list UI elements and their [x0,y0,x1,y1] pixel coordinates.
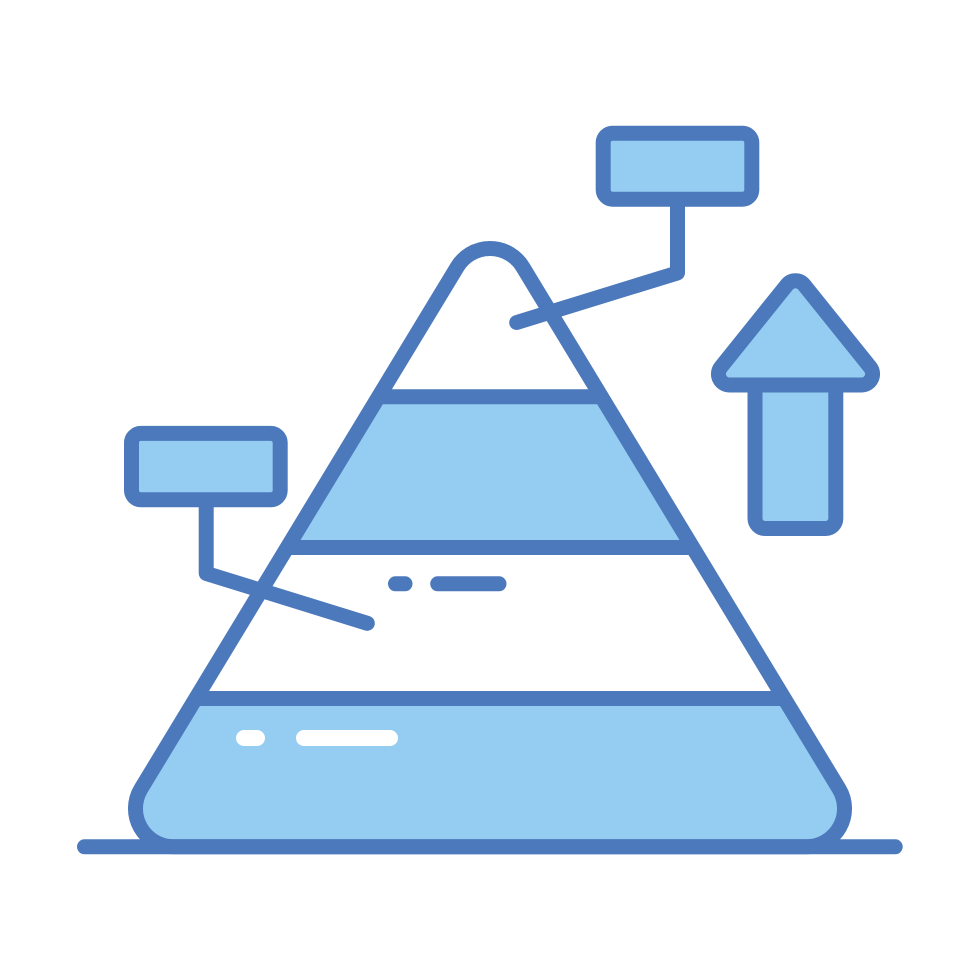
leader line [206,499,367,623]
pyramid [135,248,845,847]
left label with leader [132,433,367,623]
pyramid outline [135,248,845,847]
highlight dashes: white [244,730,390,746]
top right label with leader [517,133,752,322]
pyramid tier: second from top [287,397,693,548]
tier dividers [196,397,784,698]
leader line [517,199,678,322]
label box [603,133,752,199]
pyramid tier: base [135,698,845,847]
arrow shaft [755,385,836,528]
highlight dashes: dark [396,576,499,591]
label box [132,433,280,500]
arrow head [718,281,873,385]
up arrow [718,281,873,528]
ground line [84,839,895,854]
